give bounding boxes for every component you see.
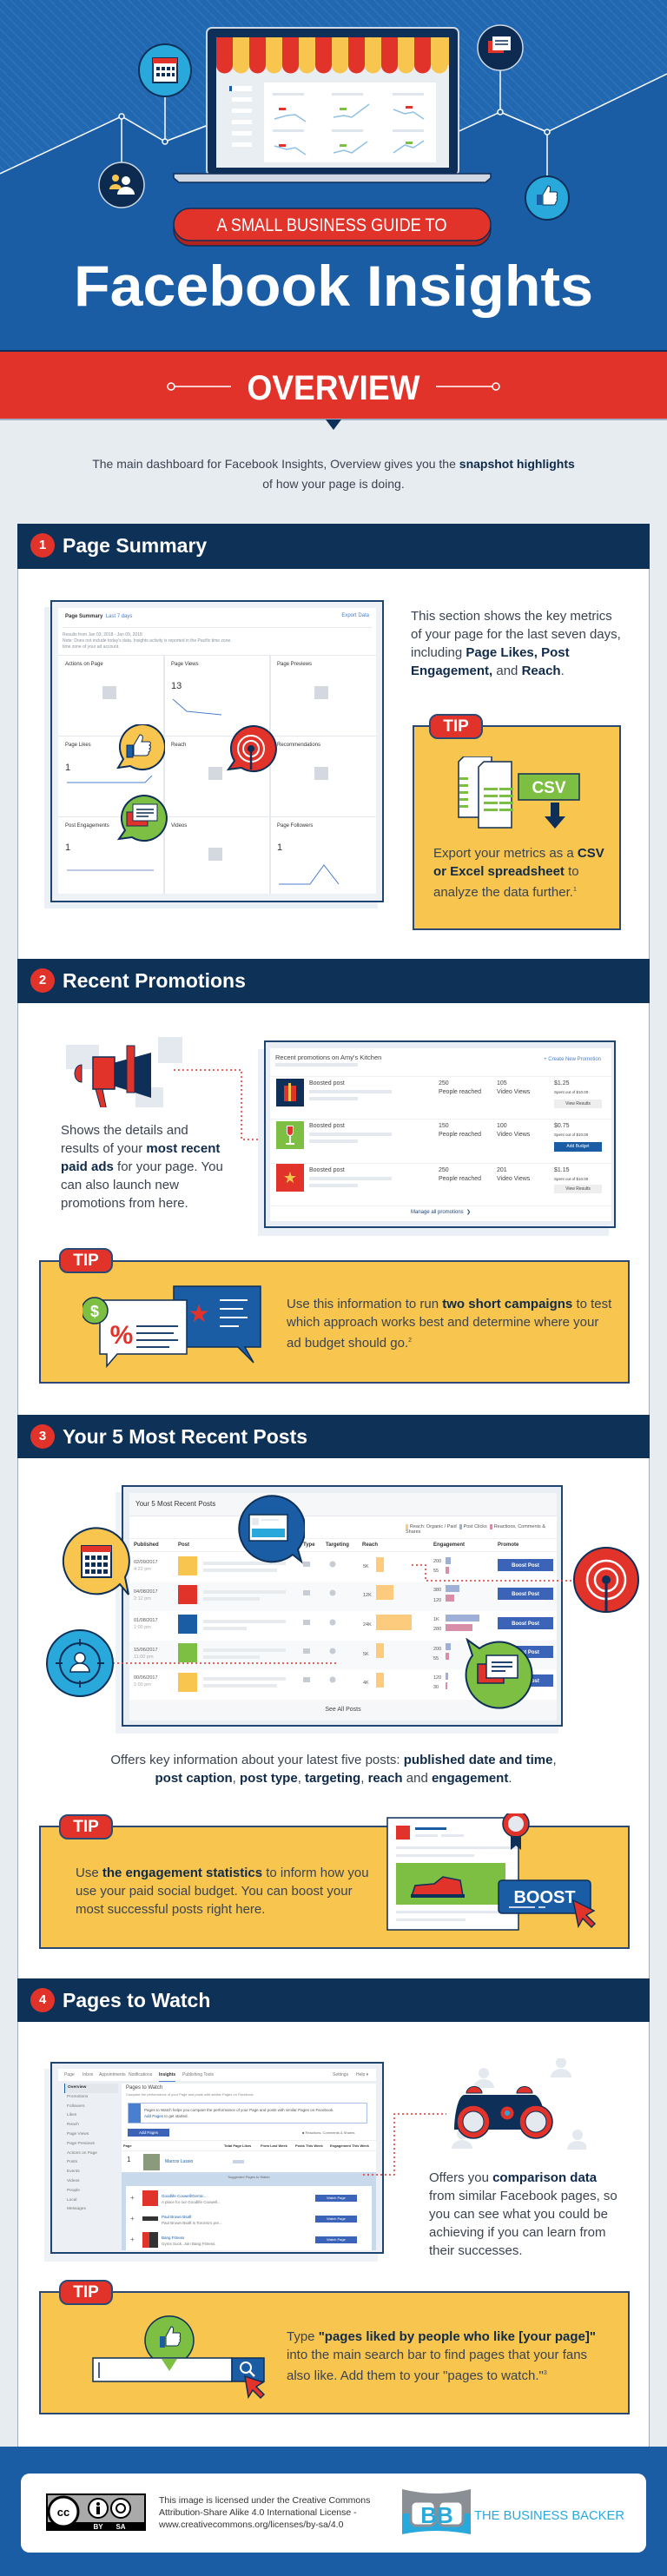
text: Add Pages to get started.: [144, 2114, 188, 2118]
promo row 2: Spent out of $10.00: [554, 1133, 588, 1137]
cc badge: SA: [116, 2523, 126, 2531]
icon: calendar bubble: [63, 1527, 130, 1595]
cc badge: BY: [93, 2523, 103, 2531]
text: Recommendations: [277, 743, 320, 748]
dotted connectors 3: [113, 1564, 571, 1664]
cc badge: [46, 2493, 146, 2531]
text: Pages to Watch: [126, 2085, 162, 2091]
section 3 header: 3: [39, 1429, 46, 1443]
text: Recent promotions on Amy's Kitchen: [275, 1054, 381, 1061]
icon: target person: [46, 1629, 114, 1697]
icon: binoculars: [452, 2058, 586, 2150]
promo row 2: $0.75: [554, 1123, 570, 1129]
promo row 3: Video Views: [497, 1176, 530, 1182]
text: 55: [433, 1569, 439, 1574]
text: 2:12 pm: [134, 1596, 151, 1602]
icon: price tags bubbles: [83, 1285, 261, 1368]
text: 200: [433, 1559, 441, 1564]
text: Pages to Watch helps you compare the performance of your Page and posts with similar Pages on Facebook.: [144, 2108, 334, 2112]
posts description: Offers key information about your latest five posts: published date and time, post caption, post type, targeting, reach and engagement.: [110, 1753, 557, 1786]
text: Goodlife Coxwell/Gerrar...: [162, 2194, 207, 2198]
text: Publishing Tools: [182, 2072, 214, 2077]
screenshot: pages to watch: [44, 2069, 378, 2262]
dotted connector 1: [174, 1069, 258, 1140]
screenshot: page summary: [44, 607, 378, 908]
text: 380: [433, 1588, 441, 1593]
section 1 header: [17, 524, 650, 569]
text: 01/08/2017: [134, 1618, 158, 1623]
text: Promotions: [67, 2095, 88, 2099]
tip 4: Type "pages liked by people who like [your page]" into the main search bar to find pages that your fans also like. Add them to your "pages to watch."3: [287, 2329, 596, 2383]
text: Manage all promotions ❯: [411, 1210, 471, 1215]
business backer logo: THE BUSINESS BACKER: [474, 2508, 624, 2523]
promo row 2: [270, 1119, 611, 1162]
text: 15/06/2017: [134, 1648, 158, 1653]
promo row 3: [270, 1163, 611, 1205]
text: Posts This Week: [295, 2143, 323, 2148]
section 2 header: [17, 959, 650, 1003]
text: Boost Post: [512, 1622, 539, 1627]
recent promotions description: Shows the details and results of your most recent paid ads for your page. You can also launch new promotions from here.: [61, 1123, 223, 1211]
icon: post bubble: [238, 1495, 305, 1564]
text: Local: [67, 2198, 76, 2203]
text: 12K: [363, 1593, 372, 1598]
tip 2: Use this information to run two short campaigns to test which approach works best and determine where your ad budget should go.2: [287, 1297, 611, 1351]
license card: [21, 2474, 646, 2553]
section 2 header: 2: [39, 973, 46, 987]
subtitle pill: A SMALL BUSINESS GUIDE TO: [217, 215, 446, 235]
text: Help ▾: [356, 2072, 368, 2077]
text: +: [130, 2194, 135, 2202]
text: People: [67, 2189, 80, 2193]
text: 5K: [363, 1652, 369, 1657]
cc badge: cc: [57, 2506, 69, 2519]
text: Gyms Suck. Join Bang Fitness.: [162, 2242, 216, 2246]
text: Published: [134, 1542, 159, 1548]
text: Videos: [67, 2179, 80, 2183]
text: A place for our Goodlife Coxwell...: [162, 2200, 221, 2204]
text: Page Previews: [277, 662, 312, 667]
text: 30: [433, 1685, 439, 1690]
text: Settings: [333, 2072, 348, 2077]
text: Total Page Likes: [224, 2143, 251, 2148]
text: Watch Page: [327, 2196, 346, 2200]
text: 1:00 pm: [134, 1625, 151, 1630]
tip tab 1: TIP: [443, 717, 469, 736]
text: Engagement This Week: [330, 2143, 369, 2148]
text: 4:22 pm: [134, 1567, 151, 1572]
text: Watch Page: [327, 2216, 346, 2221]
text: 04/08/2017: [134, 1589, 158, 1595]
text: Note: Does not include today's data. Insights activity is reported in the Pacific time zone.: [63, 638, 232, 644]
footer: [0, 2447, 667, 2576]
text: Bang Fitness: [162, 2236, 184, 2240]
laptop: [174, 28, 491, 182]
text: 24K: [363, 1622, 372, 1628]
text: 00/06/2017: [134, 1675, 158, 1681]
section 1 header: 1: [39, 538, 46, 552]
overview band: [0, 350, 667, 430]
section 3 header: Your 5 Most Recent Posts: [63, 1425, 307, 1448]
icon: people: [99, 162, 144, 208]
tip 4: [39, 2291, 630, 2414]
section 3 header: [17, 1415, 650, 1458]
section 1 header: Page Summary: [63, 534, 207, 557]
section 4 header: [17, 1978, 650, 2022]
icon: red target: [573, 1547, 639, 1613]
promo row 1: $1.25: [554, 1080, 570, 1087]
promo row 3: 201: [497, 1167, 507, 1173]
text: Marcos Lussio: [165, 2159, 193, 2164]
tip 3: Use the engagement statistics to inform how you use your paid social budget. You can boost your most successful posts right here.: [76, 1866, 369, 1917]
promo row 1: Video Views: [497, 1089, 530, 1095]
subtitle pill: [174, 208, 491, 246]
promo row 1: Boosted post: [309, 1080, 345, 1087]
text: Page: [123, 2143, 132, 2148]
icon: csv: [458, 756, 580, 829]
text: ■ Reach: Organic / Paid ■ Post Clicks ■ Reactions, Comments & Shares: [406, 1524, 545, 1535]
promo row 2: People reached: [439, 1132, 481, 1138]
text: Appointments: [99, 2072, 126, 2077]
text: 13: [171, 681, 182, 691]
text: Inbox: [83, 2072, 93, 2077]
text: Videos: [171, 823, 187, 829]
promo row 1: 250: [439, 1080, 449, 1087]
promo row 1: View Results: [565, 1101, 591, 1106]
tip 1: [413, 725, 621, 930]
promo row 3: View Results: [565, 1186, 591, 1192]
promo row 2: Boosted post: [309, 1123, 345, 1129]
text: 280: [433, 1627, 441, 1632]
text: Overview: [68, 2085, 86, 2090]
text: From Last Week: [261, 2143, 287, 2148]
text: Post: [178, 1542, 189, 1548]
text: 1K: [433, 1617, 439, 1622]
text: Promote: [498, 1542, 518, 1548]
text: Export Data: [341, 613, 369, 618]
promo row 1: Spent out of $10.00: [554, 1090, 588, 1094]
tip tab 3: TIP: [73, 1818, 99, 1836]
tip tab 4: [59, 2280, 113, 2305]
promo row 1: [270, 1076, 611, 1118]
screenshot: recent promotions: [258, 1049, 609, 1236]
text: + Create New Promotion: [544, 1057, 601, 1062]
tip tab 3: [59, 1814, 113, 1840]
promo row 3: Spent out of $10.00: [554, 1177, 588, 1181]
text: Insights: [159, 2072, 175, 2077]
text: See All Posts: [325, 1707, 361, 1713]
icon: price tags bubbles: ★: [188, 1299, 210, 1328]
icon: chat: [478, 25, 523, 70]
promo row 2: Video Views: [497, 1132, 530, 1138]
icon: thumbs bubble: [116, 724, 165, 771]
overview intro text: The main dashboard for Facebook Insights, Overview gives you the snapshot highlights of how your page is doing.: [92, 457, 575, 491]
page summary description: This section shows the key metrics of your page for the last seven days, including Page Likes, Post Engagement, and Reach.: [411, 609, 621, 678]
text: Reach: [171, 743, 186, 748]
text: Boost Post: [512, 1563, 539, 1569]
text: Reach: [362, 1542, 378, 1548]
promo row 3: Boosted post: [309, 1167, 345, 1173]
tip tab 2: TIP: [73, 1252, 99, 1270]
text: +: [130, 2215, 135, 2223]
icon: green chat: [466, 1638, 533, 1709]
text: Messages: [67, 2207, 86, 2211]
business backer logo: BB: [420, 2502, 453, 2528]
text: 1: [65, 763, 70, 773]
tip tab 1: [429, 714, 483, 739]
promo row 2: 100: [497, 1123, 507, 1129]
dotted connector 4: [363, 2113, 446, 2176]
tip 2: [39, 1260, 630, 1384]
text: Likes: [67, 2113, 76, 2117]
text: Page Views: [171, 662, 199, 667]
text: 55: [433, 1656, 439, 1661]
tip 3: [39, 1826, 630, 1949]
text: Reach: [67, 2123, 79, 2127]
text: Actions on Page: [67, 2151, 97, 2156]
text: 120: [433, 1598, 441, 1603]
icon: thumbs up: [525, 176, 569, 220]
text: ■ Reactions, Comments & Shares: [302, 2130, 354, 2135]
promo row 1: 105: [497, 1080, 507, 1087]
promo row 1: People reached: [439, 1089, 481, 1095]
text: 1: [127, 2156, 130, 2163]
promo row 3: ★: [283, 1169, 297, 1186]
text: Results from Jan 03, 2018 - Jan 09, 2018: [63, 632, 142, 637]
text: Actions on Page: [65, 662, 103, 667]
text: 02/09/2017: [134, 1560, 158, 1565]
text: 200: [433, 1647, 441, 1652]
text: Page Followers: [277, 823, 313, 829]
text: 5K: [363, 1564, 369, 1569]
text: Page Likes: [65, 743, 91, 748]
promo row 2: 150: [439, 1123, 449, 1129]
text: Your 5 Most Recent Posts: [135, 1500, 215, 1508]
tip tab 4: TIP: [73, 2283, 99, 2302]
section 4 header: Pages to Watch: [63, 1989, 210, 2011]
text: Targeting: [326, 1542, 349, 1548]
text: Type: [303, 1542, 315, 1548]
icon: csv: CSV: [532, 779, 566, 797]
text: Boost Post: [512, 1592, 539, 1597]
text: Engagement: [433, 1542, 465, 1548]
text: Watch Page: [327, 2237, 346, 2242]
text: Paul Brown Bsaft is Toronto's pre...: [162, 2221, 222, 2225]
tip 1: Export your metrics as a CSV or Excel spreadsheet to analyze the data further.1: [433, 846, 604, 900]
icon: search with like pin: [92, 2315, 265, 2399]
text: Posts: [67, 2160, 77, 2164]
text: 1: [65, 842, 70, 853]
business backer logo: [402, 2489, 624, 2534]
pages to watch description: Offers you comparison data from similar Facebook pages, so you can see what you could be achieving if you can learn from their successes.: [429, 2170, 617, 2258]
section 4 header: 4: [39, 1992, 46, 2007]
text: Boost Post: [512, 1679, 539, 1684]
text: Add Pages: [139, 2130, 158, 2135]
main white panel: [17, 524, 650, 2447]
text: 11:00 pm: [134, 1655, 154, 1660]
title: Facebook Insights: [74, 254, 593, 318]
text: 1:00 pm: [134, 1682, 151, 1688]
text: Post Engagements: [65, 823, 109, 829]
text: Page: [64, 2072, 75, 2077]
text: Compare the performance of your Page and posts with similar Pages on Facebook.: [126, 2092, 254, 2097]
screenshot: recent posts table: [116, 1492, 558, 1734]
text: time zone of your ad account.: [63, 644, 120, 650]
icon: calendar: [139, 44, 191, 96]
icon: price tags bubbles: $: [90, 1303, 99, 1320]
license card: This image is licensed under the Creative Commons Attribution-Share Alike 4.0 International License - www.creativecommons.org/licenses/by-sa/4.0: [159, 2495, 370, 2530]
text: 120: [433, 1675, 441, 1681]
text: Page Summary Last 7 days: [65, 614, 132, 619]
text: +: [130, 2236, 135, 2243]
overview band: OVERVIEW: [247, 369, 420, 407]
header banner: [0, 0, 667, 350]
text: 4K: [363, 1681, 369, 1686]
promo row 3: People reached: [439, 1176, 481, 1182]
promo row 3: $1.15: [554, 1167, 570, 1173]
rows: [129, 1553, 557, 1699]
icon: boost post card: BOOST: [513, 1888, 576, 1907]
icon: price tags bubbles: %: [110, 1321, 133, 1350]
icon: red target bubble: [226, 725, 277, 773]
icon: green chat bubble: [116, 795, 168, 842]
text: Followers: [67, 2104, 85, 2109]
tip tab 2: [59, 1248, 113, 1273]
text: Events: [67, 2170, 80, 2174]
text: Paul Brown Bsaft: [162, 2215, 192, 2219]
text: Page Previews: [67, 2142, 95, 2146]
text: Notifications: [129, 2072, 152, 2077]
text: 1: [277, 842, 282, 853]
text: Page Views: [67, 2132, 89, 2137]
icon: boost post card: [386, 1813, 596, 1931]
text: Suggested Pages to Watch: [228, 2175, 270, 2179]
promo row 2: Add Budget: [566, 1144, 590, 1149]
section 2 header: Recent Promotions: [63, 969, 246, 992]
text: Boost Post: [512, 1650, 539, 1655]
promo row 3: 250: [439, 1167, 449, 1173]
icon: megaphone: [66, 1037, 182, 1107]
